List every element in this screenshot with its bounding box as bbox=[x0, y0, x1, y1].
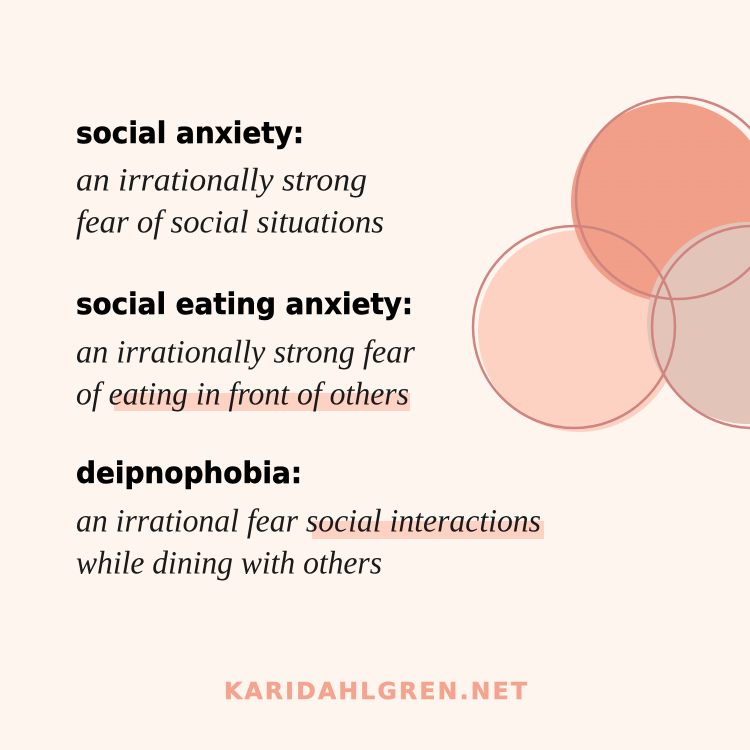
definition: social anxiety: fear of social situations bbox=[76, 204, 384, 240]
venn circles decoration bbox=[473, 97, 750, 432]
definition: social eating anxiety: an irrationally strong fear bbox=[76, 334, 415, 370]
definition: deipnophobia: while dining with others bbox=[76, 546, 382, 582]
definition: social eating anxiety: of eating in front of others bbox=[76, 376, 409, 412]
footer website: KARIDAHLGREN.NET bbox=[224, 677, 527, 705]
definition: social eating anxiety bbox=[76, 334, 415, 412]
heading: social anxiety: social anxiety: bbox=[76, 116, 304, 150]
definition: social anxiety: an irrationally strong bbox=[76, 162, 367, 198]
heading: social eating anxiety: social eating anxiety: bbox=[76, 287, 413, 321]
definition: deipnophobia: an irrational fear social interactions bbox=[76, 504, 541, 540]
heading: deipnophobia: deipnophobia: bbox=[76, 456, 302, 490]
definition: deipnophobia bbox=[76, 504, 544, 582]
definition: social anxiety bbox=[76, 162, 384, 240]
